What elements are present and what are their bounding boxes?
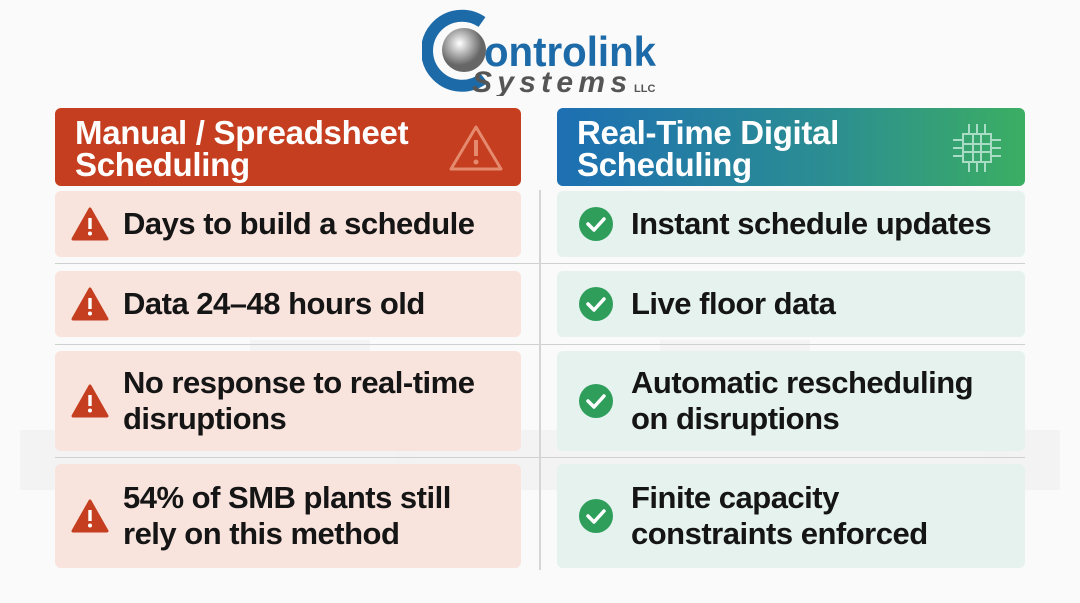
icon: warning xyxy=(72,499,109,532)
text: on disruptions xyxy=(631,401,839,436)
right rows xyxy=(557,191,1025,257)
icon: warning xyxy=(72,384,109,418)
left rows xyxy=(55,191,521,257)
header: manual: Scheduling xyxy=(75,146,250,183)
icon: warning xyxy=(72,287,109,320)
icon: check xyxy=(579,287,613,321)
header: manual xyxy=(55,108,521,186)
left rows: Days to build a schedule xyxy=(123,206,474,241)
text: constraints enforced xyxy=(631,516,928,551)
text: Finite capacity xyxy=(631,480,839,515)
icon: warning xyxy=(72,207,109,240)
text: Automatic rescheduling xyxy=(631,365,973,400)
text: Live floor data xyxy=(631,286,835,321)
header: digital xyxy=(557,108,1025,186)
logo xyxy=(422,10,657,96)
text: rely on this method xyxy=(123,516,399,551)
text: No response to real-time xyxy=(123,365,474,400)
logo: ontrolink xyxy=(484,28,657,75)
text: 54% of SMB plants still xyxy=(123,480,451,515)
text: Data 24–48 hours old xyxy=(123,286,425,321)
logo: LLC xyxy=(634,83,655,95)
icon: check xyxy=(579,207,613,241)
header: digital: Scheduling xyxy=(577,146,752,183)
right rows: Instant schedule updates xyxy=(631,206,991,241)
icon: chip xyxy=(953,124,1001,172)
header: digital: Real-Time Digital xyxy=(577,114,839,151)
divider xyxy=(539,190,541,570)
text: disruptions xyxy=(123,401,286,436)
header: manual: Manual / Spreadsheet xyxy=(75,114,408,151)
icon: check xyxy=(579,384,613,418)
icon: check xyxy=(579,499,613,533)
icon: warning outline xyxy=(450,125,502,170)
background factory silhouette xyxy=(20,300,1060,500)
